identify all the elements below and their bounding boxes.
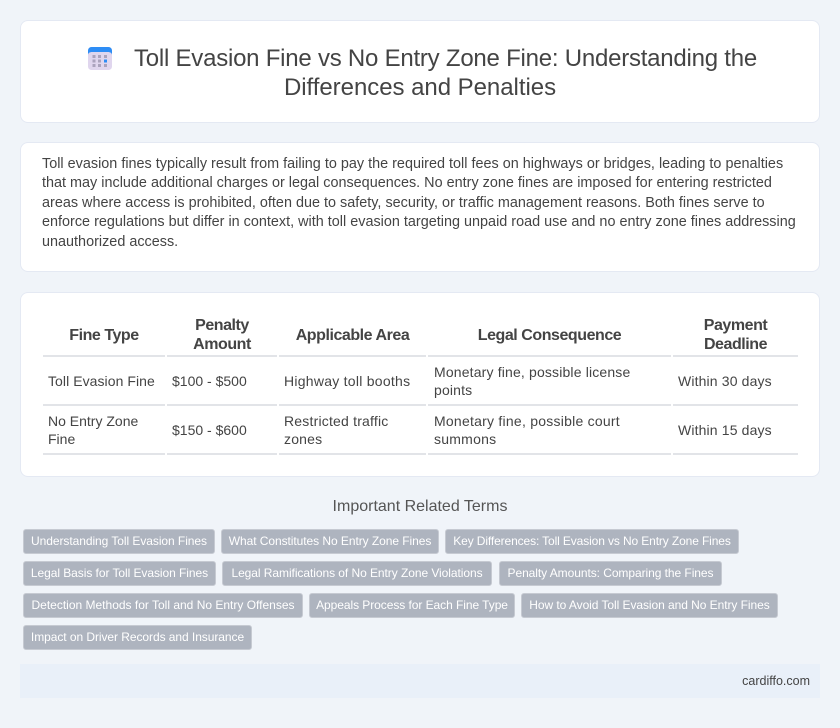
table row: no entry zone fine: Fine <box>48 431 75 447</box>
table row: toll evasion fine: $100 - $500 <box>172 373 247 389</box>
related term tags: Legal Ramifications of No Entry Zone Violations <box>231 566 483 580</box>
table row: toll evasion fine: points <box>434 382 472 398</box>
table row: no entry zone fine: summons <box>434 431 496 447</box>
table header: Penalty <box>195 317 249 334</box>
related term tags: Detection Methods for Toll and No Entry Offenses <box>31 598 295 612</box>
text block: intro: that may include additional charges or legal consequences. No entry zone fines are imposed for entering restricted <box>42 175 772 191</box>
panel: header <box>20 20 820 123</box>
table row: no entry zone fine: Within 15 days <box>678 422 772 438</box>
related term tags: Understanding Toll Evasion Fines <box>31 534 207 548</box>
table row: toll evasion fine: Monetary fine, possible license <box>434 364 630 380</box>
table header: Legal Consequence <box>478 327 621 344</box>
table header: Applicable Area <box>296 327 409 344</box>
table header: Payment <box>704 317 767 334</box>
related term tags: Penalty Amounts: Comparing the Fines <box>508 566 713 580</box>
icon: calendar <box>88 47 112 70</box>
table row: no entry zone fine: No Entry Zone <box>48 413 138 429</box>
table row: toll evasion fine: Toll Evasion Fine <box>48 373 155 389</box>
title: Toll Evasion Fine vs No Entry Zone Fine: Understanding the <box>134 45 757 72</box>
panel: intro paragraph <box>20 142 820 272</box>
text block: intro: enforce regulations but differ in context, with toll evasion targeting unpaid road use and no entry zone fines addressing <box>42 214 796 230</box>
related term tags: Appeals Process for Each Fine Type <box>316 598 508 612</box>
table header: Amount <box>193 336 251 353</box>
text block: intro: areas where access is prohibited, often due to safety, security, or traffic management reasons. Both fines serve to <box>42 195 765 211</box>
table row: no entry zone fine: Monetary fine, possible court <box>434 413 620 429</box>
related term tags <box>23 529 778 650</box>
related term tags: How to Avoid Toll Evasion and No Entry Fines <box>529 598 770 612</box>
related term tags: What Constitutes No Entry Zone Fines <box>229 534 431 548</box>
panel: comparison table <box>20 292 820 477</box>
table row: toll evasion fine: Within 30 days <box>678 373 772 389</box>
title <box>134 45 757 101</box>
table row: no entry zone fine: zones <box>284 431 322 447</box>
heading: important related terms: Important Related Terms <box>333 498 507 515</box>
table row: no entry zone fine <box>48 413 772 447</box>
title: Differences and Penalties <box>284 74 556 101</box>
footer <box>20 664 820 698</box>
table row: toll evasion fine: Highway toll booths <box>284 373 410 389</box>
text block: intro: unauthorized access. <box>42 234 178 250</box>
table row: toll evasion fine <box>48 364 772 398</box>
text block: intro <box>42 156 796 250</box>
table row: no entry zone fine: Restricted traffic <box>284 413 388 429</box>
table header: Fine Type <box>69 327 139 344</box>
text block: intro: Toll evasion fines typically result from failing to pay the required toll fees on highways or bridges, leading to penalties <box>42 156 783 172</box>
table row: no entry zone fine: $150 - $600 <box>172 422 247 438</box>
table header <box>69 317 768 353</box>
related term tags: Impact on Driver Records and Insurance <box>31 630 244 644</box>
related term tags: Legal Basis for Toll Evasion Fines <box>31 566 208 580</box>
table header: Deadline <box>704 336 767 353</box>
footer site name: cardiffo.com <box>742 674 810 688</box>
related term tags: Key Differences: Toll Evasion vs No Entry Zone Fines <box>453 534 731 548</box>
